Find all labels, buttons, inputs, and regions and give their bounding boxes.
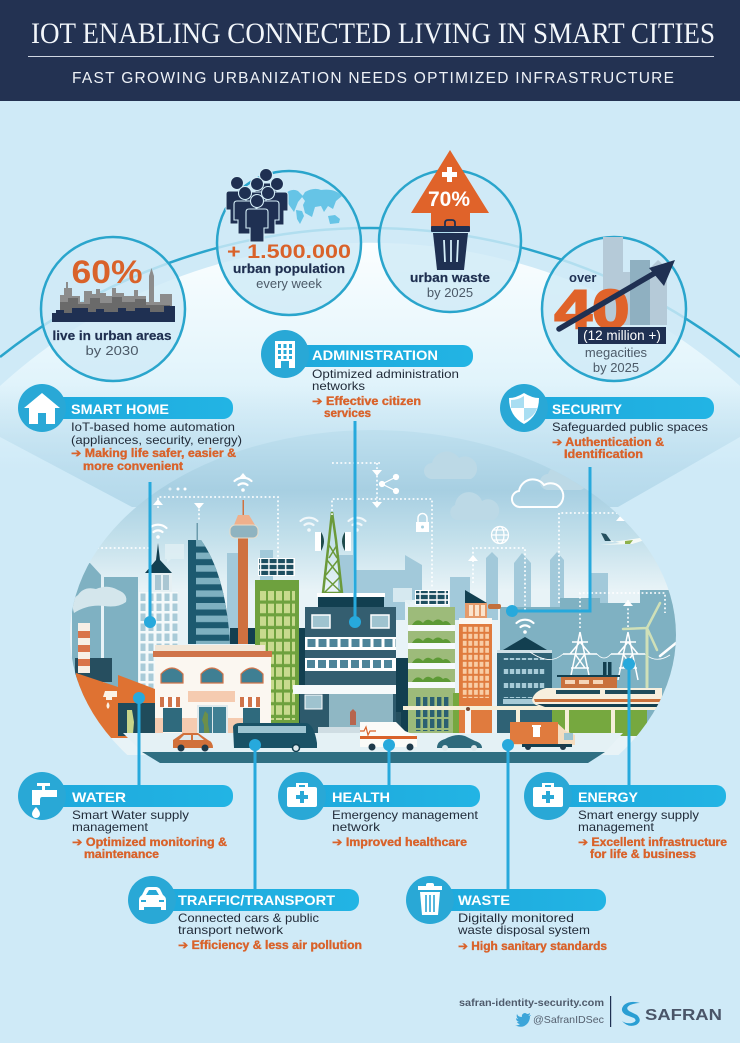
panel: traffic transport: ➔ Efficiency & less air pollution	[178, 940, 362, 952]
connector: energy	[623, 658, 635, 785]
antenna tower	[315, 512, 351, 593]
panel: waste: Digitally monitored	[458, 911, 574, 925]
circle: urban waste: by 2025	[427, 285, 473, 300]
12 million label: (12 million +)	[583, 328, 661, 343]
car: orange	[173, 733, 213, 752]
connector: smart home	[144, 482, 156, 628]
buildings	[603, 237, 667, 325]
central administration building	[293, 593, 411, 735]
solar panel	[258, 558, 295, 576]
panel: waste: WASTE	[458, 893, 510, 908]
terrace green building	[408, 590, 460, 735]
panel: smart home: more convenient	[83, 461, 183, 473]
caption: urban waste	[410, 271, 490, 285]
circle: urban waste	[379, 150, 521, 312]
panel: smart home	[18, 384, 242, 473]
icon: shield	[509, 393, 539, 424]
shaded halo behind city	[0, 385, 740, 507]
panel: water: maintenance	[84, 849, 159, 861]
icon: trash bin	[431, 220, 470, 270]
connecting arc	[0, 228, 740, 357]
panel: administration: services	[324, 408, 371, 420]
panel: administration: Optimized administration	[312, 367, 459, 381]
footer credits	[459, 996, 722, 1027]
caption: live in urban areas	[52, 329, 172, 343]
panel: administration: ➔ Effective citizen	[312, 396, 421, 408]
60% value: 60%	[72, 254, 142, 290]
panel: health: Emergency management	[332, 808, 479, 822]
icon: world map	[286, 189, 342, 224]
station and chimneys	[557, 662, 620, 688]
city illustration	[60, 425, 690, 755]
ambulance	[360, 722, 417, 750]
connector: waste	[502, 739, 514, 889]
panel: health: HEALTH	[332, 790, 390, 805]
sedan	[437, 735, 482, 751]
plus sign	[442, 167, 457, 182]
+1.500.000 value: + 1.500.000	[227, 242, 351, 263]
platform slab	[142, 752, 605, 763]
circle: megacities	[542, 237, 686, 381]
curved tower	[188, 523, 230, 644]
road	[123, 733, 623, 738]
panel: water	[18, 772, 233, 861]
panel: smart home: ➔ Making life safer, easier &	[71, 448, 236, 460]
panel: security: Safeguarded public spaces	[552, 420, 708, 434]
icon: globe	[492, 526, 508, 544]
icon: crowd	[226, 168, 288, 242]
icon: faucet	[32, 783, 57, 818]
pedestrians	[350, 707, 471, 734]
icon: trash bin	[418, 883, 442, 915]
icon: twitter bird	[515, 1013, 531, 1027]
logo: Safran: SAFRAN	[645, 1007, 722, 1024]
circle: urban population	[217, 168, 361, 315]
panel: smart home: SMART HOME	[71, 402, 169, 417]
panel: smart home: (appliances, security, energy)	[71, 433, 242, 447]
panel: health: network	[332, 820, 381, 834]
speech bubbles	[165, 544, 412, 606]
growth arrow	[559, 260, 675, 329]
orange building	[459, 590, 501, 735]
background dome glow	[0, 243, 740, 640]
panel: energy: ENERGY	[578, 790, 638, 805]
bus	[233, 723, 317, 752]
mid skyline dark	[72, 563, 676, 735]
truck	[510, 722, 575, 750]
panel: traffic transport: transport network	[178, 923, 284, 937]
network dotted lines and icons	[97, 463, 665, 634]
panel: water: Smart Water supply	[72, 808, 189, 822]
circle: 60% live in urban areas	[41, 237, 185, 381]
airplane	[600, 533, 645, 545]
panel: security	[500, 384, 714, 461]
panel: energy: for life & business	[590, 849, 696, 861]
panel: energy: management	[578, 820, 655, 834]
clouds	[424, 458, 584, 512]
40 value: 40	[554, 278, 630, 340]
caption: megacities	[585, 345, 648, 360]
panel: security: SECURITY	[552, 402, 622, 417]
panel: smart home: IoT-based home automation	[71, 420, 235, 434]
panel: health	[278, 772, 480, 849]
connector: health	[383, 739, 395, 785]
panel: health: ➔ Improved healthcare	[332, 837, 467, 849]
power pylons	[530, 632, 670, 680]
header band	[0, 0, 740, 101]
observation tower	[230, 500, 258, 644]
panel: traffic transport: TRAFFIC/TRANSPORT	[178, 893, 336, 908]
skyline	[52, 268, 175, 322]
panel: waste	[406, 876, 607, 953]
wind turbine	[623, 603, 676, 687]
panel: traffic transport: Connected cars & public	[178, 911, 319, 925]
panel: water: ➔ Optimized monitoring &	[72, 837, 227, 849]
panel: security: ➔ Authentication &	[552, 437, 664, 449]
factory	[75, 623, 155, 738]
panel: administration: networks	[312, 379, 365, 393]
white tower	[139, 543, 178, 692]
green building	[255, 580, 305, 723]
icon: medical bag	[533, 783, 563, 807]
connector: administration	[349, 421, 361, 628]
circle: urban population: every week	[256, 276, 322, 291]
far skyline	[227, 550, 608, 640]
panel: administration: ADMINISTRATION	[312, 348, 438, 363]
icon: car	[139, 887, 166, 910]
connector: water	[133, 692, 145, 785]
panel: water: management	[72, 820, 149, 834]
shop house	[153, 645, 272, 736]
panel: water: WATER	[72, 790, 126, 805]
icon: wifi signals	[150, 473, 534, 634]
circle: 60% live in urban areas: by 2030	[86, 343, 138, 358]
outlined cloud	[512, 479, 563, 507]
panel: energy: ➔ Excellent infrastructure	[578, 837, 727, 849]
panel: waste: ➔ High sanitary standards	[458, 941, 607, 953]
subtitle: FAST GROWING URBANIZATION NEEDS OPTIMIZED INFRASTRUCTURE	[72, 70, 674, 87]
ground and rail	[403, 706, 660, 736]
icon: lock	[416, 514, 429, 532]
footer credits: safran-identity-security.com	[459, 997, 604, 1009]
70% value: 70%	[428, 188, 470, 211]
arrow up	[411, 150, 489, 228]
panel: waste: waste disposal system	[457, 923, 590, 937]
train	[532, 688, 662, 707]
teal building	[497, 637, 552, 735]
panel: energy: Smart energy supply	[578, 808, 699, 822]
icon: building	[275, 341, 295, 368]
over label: over	[569, 270, 596, 285]
footer credits: @SafranIDSec	[533, 1014, 604, 1026]
icon: medical bag	[287, 783, 317, 807]
sky	[60, 425, 690, 755]
panel: administration	[261, 330, 473, 420]
panel: traffic transport	[128, 876, 362, 952]
connector: security	[506, 467, 590, 617]
icon: house	[24, 393, 60, 424]
circle: megacities: by 2025	[593, 360, 639, 375]
smoke	[73, 587, 126, 613]
panel: energy	[524, 772, 727, 861]
connector: traffic	[249, 739, 261, 889]
icon: share	[380, 474, 398, 494]
logo: Safran	[622, 1002, 722, 1026]
caption: urban population	[233, 262, 345, 276]
panel: security: Identification	[564, 449, 643, 461]
